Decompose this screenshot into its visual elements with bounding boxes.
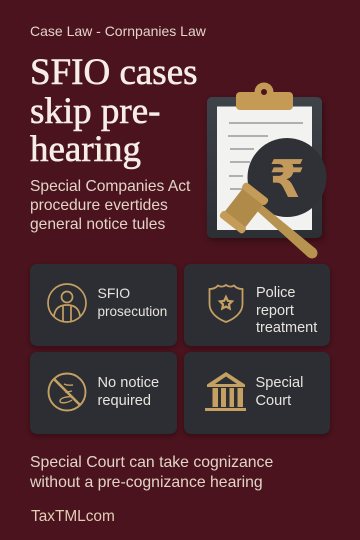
label: report — [256, 302, 294, 318]
bottom summary: Special Court can take cognizance — [30, 454, 273, 471]
bottom summary: without a pre-cognizance hearing — [30, 474, 263, 491]
label — [256, 375, 303, 408]
title: skip pre- — [30, 90, 160, 132]
footer brand: TaxTMLcom — [31, 508, 115, 525]
subtitle — [30, 178, 190, 233]
paper sheet — [217, 106, 312, 230]
label: treatment — [256, 320, 317, 336]
bottom summary — [30, 454, 273, 491]
label — [98, 285, 167, 319]
category label: Case Law - Cornpanies Law — [30, 23, 206, 39]
label: prosecution — [98, 304, 167, 319]
icon: court building — [205, 372, 246, 411]
icon: person in circle — [47, 283, 87, 323]
rupee badge — [248, 138, 326, 217]
label: Special — [256, 375, 303, 391]
label: No notice — [98, 375, 159, 391]
label: Court — [256, 392, 291, 408]
label: required — [98, 392, 151, 408]
card: no notice required — [30, 352, 177, 434]
rupee symbol: ₹ — [269, 150, 305, 210]
label: SFIO — [98, 285, 130, 301]
label — [98, 375, 159, 408]
gavel — [219, 181, 318, 258]
document lines — [228, 123, 303, 189]
subtitle: general notice tules — [30, 216, 165, 233]
card: special court — [184, 352, 330, 434]
card: SFIO prosecution — [30, 264, 177, 346]
title: SFIO cases — [30, 52, 198, 93]
subtitle: procedure evertides — [30, 197, 168, 214]
icon: prohibited notice — [48, 372, 86, 412]
title: hearing — [30, 129, 141, 170]
label: Police — [256, 285, 296, 301]
label — [256, 285, 318, 336]
title — [30, 52, 198, 170]
clipboard board — [207, 97, 322, 238]
subtitle: Special Companies Act — [30, 178, 190, 195]
icon: police shield — [208, 284, 244, 323]
card: police report treatment — [184, 264, 330, 346]
clip — [236, 82, 293, 110]
